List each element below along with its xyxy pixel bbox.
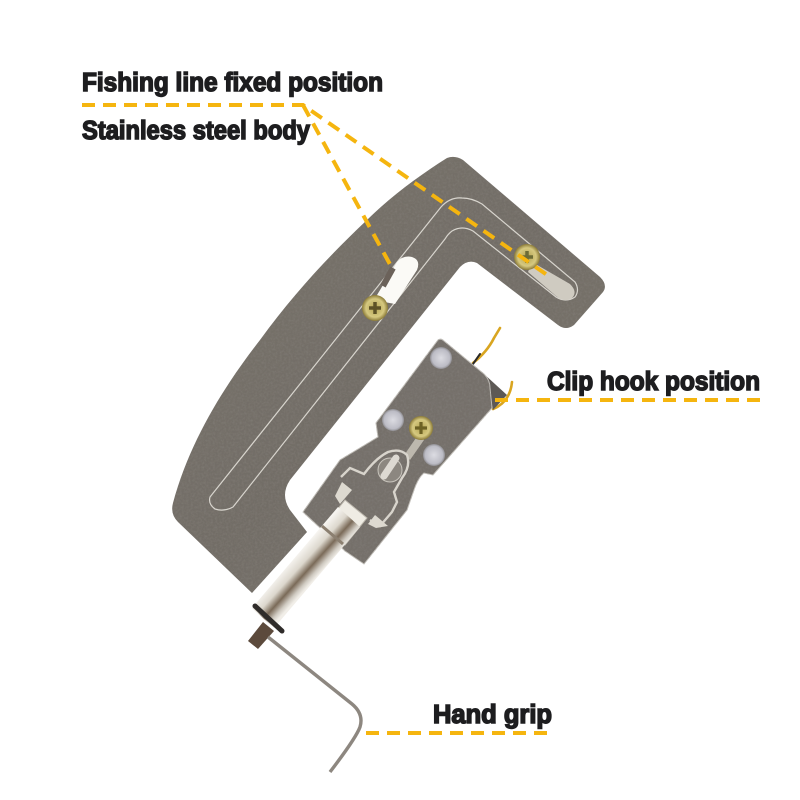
rivet 1 <box>430 347 452 369</box>
metal body of the tool <box>172 157 605 593</box>
screw on plate <box>409 416 433 440</box>
callout: stainless steel body: Stainless steel body <box>82 117 311 145</box>
slot outline <box>210 198 578 510</box>
callout: fishing line fixed position <box>82 69 550 277</box>
callout: clip hook position: Clip hook position <box>547 368 760 396</box>
hook clip hooks <box>473 328 512 409</box>
callout: hand grip: Hand grip <box>433 701 552 729</box>
upper slot opening <box>374 257 418 304</box>
rivet 2 <box>382 409 404 431</box>
clip plate <box>303 339 507 564</box>
collar <box>255 606 282 631</box>
wire clip <box>341 451 408 526</box>
spring strip <box>405 432 424 460</box>
right slot opening <box>528 262 575 300</box>
hand grip wire <box>268 637 361 772</box>
brown pin <box>248 622 274 649</box>
screw: line fixed position <box>514 244 540 270</box>
cylinder handle <box>248 500 367 649</box>
callout: stainless steel body <box>82 105 392 268</box>
screw: stainless slot <box>362 295 388 321</box>
callout: fishing line fixed position: Fishing line fixed position <box>82 69 383 97</box>
rivet 3 <box>423 444 445 466</box>
